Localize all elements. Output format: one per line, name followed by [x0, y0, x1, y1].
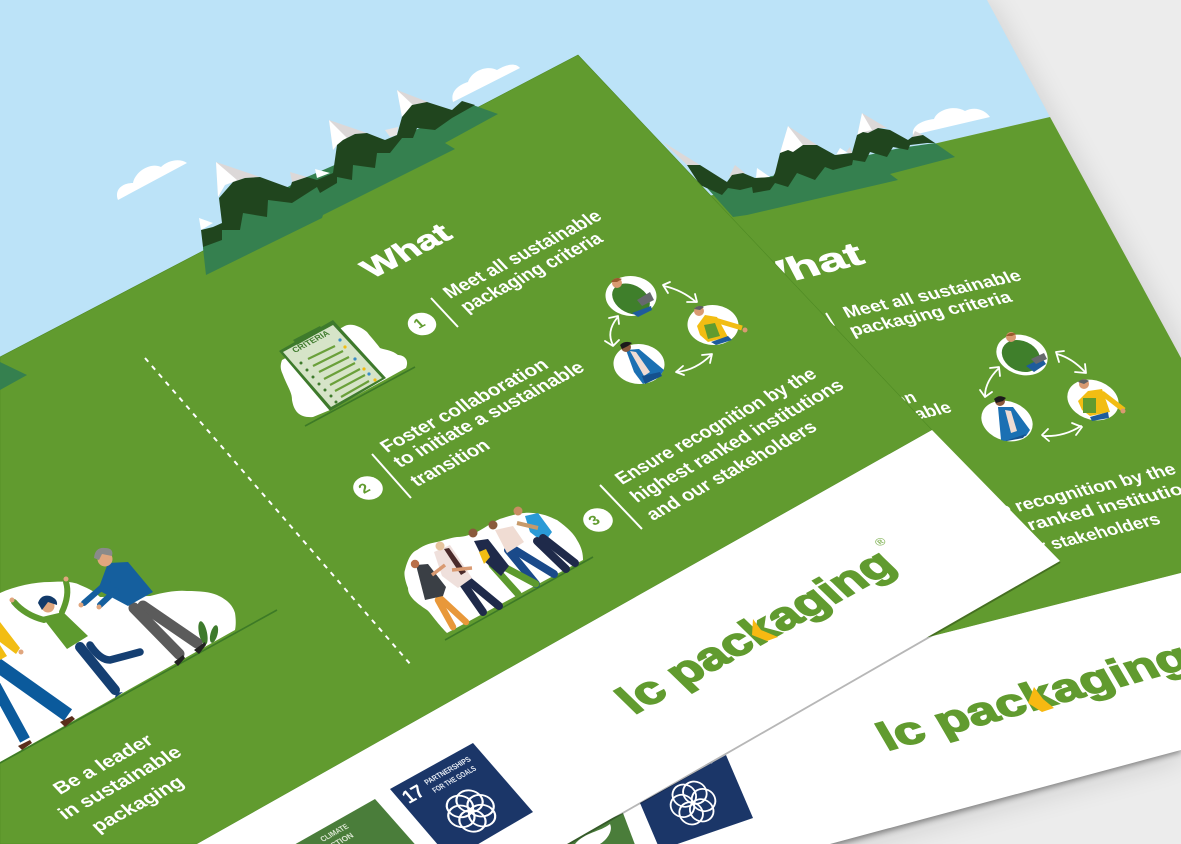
back climate action tile	[540, 813, 637, 844]
woman in green top	[10, 576, 140, 698]
clipboard	[279, 320, 386, 411]
back goal 17 ring icon	[664, 777, 722, 829]
person in blue jacket	[603, 336, 675, 392]
back partnerships tile	[640, 755, 753, 844]
illustration: leader group jumping	[0, 548, 277, 763]
step 3 number badge	[577, 504, 619, 536]
person in green sweater	[988, 330, 1056, 380]
person with green trousers	[468, 528, 536, 594]
heading: What: What	[354, 218, 459, 284]
step 3 text: highest ranked institutions	[626, 376, 849, 507]
back text: step 1: Meet all sustainable	[839, 266, 1025, 321]
front white footer	[197, 430, 1060, 844]
step 1 text: Meet all sustainable	[439, 207, 607, 303]
shadow of back leaflet	[700, 0, 1181, 844]
right cloud	[452, 65, 520, 102]
back mountains	[663, 113, 955, 217]
goal text: be a leader: packaging	[87, 773, 189, 837]
step 3 text: and our stakeholders	[642, 418, 822, 525]
panel: back leaflet	[480, 0, 1181, 844]
cycle arrows	[605, 282, 712, 375]
climate action tile: CLIMATE	[318, 822, 351, 844]
illustration: criteria clipboard: CRITERIA	[290, 328, 332, 354]
step 2 text: transition	[406, 436, 495, 491]
back step divider	[826, 313, 834, 326]
back person in blue shirt	[514, 506, 575, 569]
ground line	[0, 610, 277, 763]
man in blue sweater	[78, 548, 206, 666]
woman with orange trousers	[411, 560, 466, 627]
back cloud	[913, 108, 990, 135]
back heading: What	[733, 235, 870, 299]
step 1 divider	[431, 298, 458, 327]
front sky	[0, 0, 578, 357]
back text: step 1: packaging criteria	[845, 287, 1016, 339]
person in yellow sweater	[0, 622, 75, 750]
illustration: criteria clipboard	[279, 320, 415, 426]
illustration: stakeholders shaking hands	[404, 506, 593, 640]
person in green sweater	[595, 268, 667, 324]
ground line	[305, 367, 415, 426]
back text: step 3: Ensure recognition by the	[943, 459, 1179, 531]
white blob	[281, 325, 407, 417]
white blob	[0, 582, 236, 762]
back collaboration cycle	[973, 330, 1127, 446]
back green field	[480, 117, 1181, 780]
step 2 text: Foster collaboration	[376, 355, 553, 457]
person in yellow sweater	[677, 297, 749, 353]
partnerships for the goals tile	[390, 743, 533, 844]
plant	[197, 620, 220, 646]
back logo: lc packaging	[868, 634, 1181, 759]
edge line of front leaflet	[567, 562, 1060, 844]
climate action tile	[285, 799, 420, 844]
step 3 text: Ensure recognition by the	[611, 365, 821, 489]
partnerships for the goals tile: PARTNERSHIPS	[422, 755, 473, 787]
back text: step 3	[943, 459, 1181, 569]
front green field	[0, 55, 932, 844]
cycle arrows	[980, 351, 1086, 441]
woman with striped blouse	[434, 542, 499, 612]
illustration: collaboration cycle	[595, 268, 749, 392]
back text: step 2: to initiate a sustainable	[750, 397, 955, 459]
back partnerships tile: FOR THE GOALS	[667, 756, 714, 777]
step 1 text: packaging criteria	[456, 229, 608, 317]
white blob	[404, 513, 583, 633]
step 1 number badge	[402, 308, 442, 340]
step 2 number badge: 2	[355, 480, 374, 497]
back white footer	[480, 573, 1181, 844]
back text: step 2: Foster collaboration	[749, 387, 920, 441]
step 3 divider	[600, 485, 642, 529]
goal 17 ring icon	[437, 784, 505, 838]
step 2 text: to initiate a sustainable	[389, 358, 589, 472]
step 1 number badge: 1	[410, 315, 429, 332]
mountains on the horizon	[0, 90, 498, 390]
person in blue trousers	[488, 520, 554, 584]
person in blue jacket	[973, 396, 1041, 446]
dashed separator	[145, 358, 411, 665]
goal text: be a leader	[49, 731, 189, 837]
front logo: ®	[871, 535, 889, 549]
goal text: be a leader: in sustainable	[54, 743, 187, 824]
back sky	[480, 0, 1050, 300]
ground line	[445, 557, 593, 640]
step 2 number badge	[347, 472, 389, 504]
person in yellow sweater	[1059, 375, 1127, 425]
partnerships for the goals tile: FOR THE GOALS	[430, 764, 479, 795]
step 2 divider	[372, 454, 411, 498]
goal text: be a leader: Be a leader	[49, 731, 158, 799]
partnerships for the goals tile: 17	[398, 781, 430, 808]
left cloud	[117, 160, 187, 200]
front logo: lc packaging	[605, 541, 905, 722]
back text: step 3: and our stakeholders	[977, 509, 1164, 569]
yellow document	[479, 549, 490, 564]
step 3 number badge: 3	[585, 512, 604, 529]
